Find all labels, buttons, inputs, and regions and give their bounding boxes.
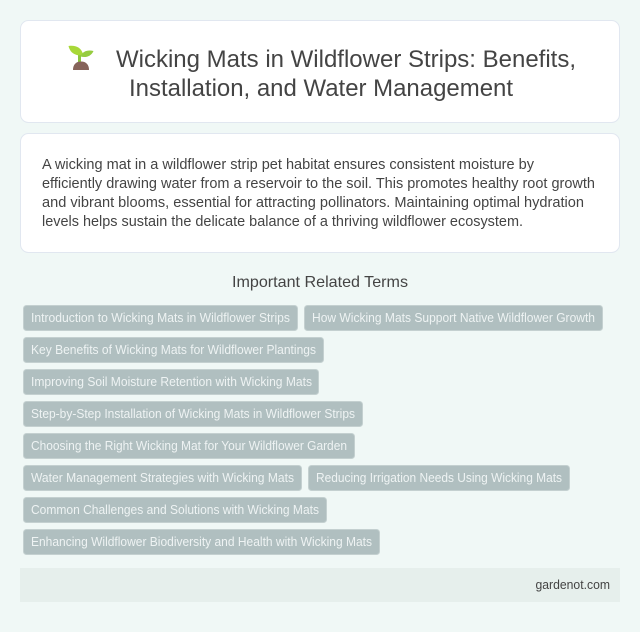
tag: soil moisture: Improving Soil Moisture Retention with Wicking Mats [31, 375, 312, 389]
panel: intro paragraph: efficiently drawing water from a reservoir to the soil. This promotes healthy root growth [42, 175, 595, 192]
tag: installation: Step-by-Step Installation of Wicking Mats in Wildflower Strips [31, 407, 355, 421]
footer: gardenot.com [536, 578, 610, 592]
icon: seedling [68, 46, 94, 70]
tag: irrigation: Reducing Irrigation Needs Using Wicking Mats [316, 471, 562, 485]
panel: intro paragraph: levels helps sustain the delicate balance of a thriving wildflower ecosystem. [42, 213, 523, 230]
heading: related terms: Important Related Terms [232, 274, 408, 291]
panel: intro paragraph: and vibrant blooms, essential for attracting pollinators. Maintaining optimal hydration [42, 194, 584, 211]
tag: water management: Water Management Strategies with Wicking Mats [31, 471, 294, 485]
tag: challenges: Common Challenges and Solutions with Wicking Mats [31, 503, 319, 517]
panel: intro paragraph [20, 134, 620, 252]
related term tags [24, 306, 602, 554]
panel: title card [20, 20, 620, 122]
tag: choosing: Choosing the Right Wicking Mat for Your Wildflower Garden [31, 439, 347, 453]
tag: native growth [304, 306, 602, 330]
tag: introduction: Introduction to Wicking Mats in Wildflower Strips [31, 311, 290, 325]
tag: irrigation [308, 466, 570, 490]
title text [116, 46, 576, 102]
panel: intro paragraph: A wicking mat in a wildflower strip pet habitat ensures consistent moisture by [42, 156, 534, 173]
title text: Wicking Mats in Wildflower Strips: Benefits, [116, 46, 576, 73]
tag: challenges [24, 498, 326, 522]
tag: choosing [24, 434, 354, 458]
tag: native growth: How Wicking Mats Support Native Wildflower Growth [312, 311, 595, 325]
tag: introduction [24, 306, 298, 330]
tag: installation [24, 402, 362, 426]
tag: biodiversity [24, 530, 380, 554]
tag: key benefits: Key Benefits of Wicking Mats for Wildflower Plantings [31, 343, 316, 357]
tag: biodiversity: Enhancing Wildflower Biodiversity and Health with Wicking Mats [31, 535, 372, 549]
tag: key benefits [24, 338, 324, 362]
tag: soil moisture [24, 370, 318, 394]
title text: Installation, and Water Management [129, 75, 513, 102]
footer [20, 568, 620, 602]
tag: water management [24, 466, 302, 490]
